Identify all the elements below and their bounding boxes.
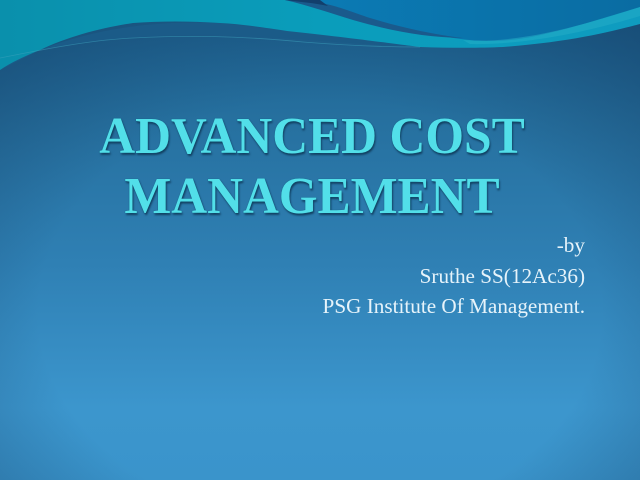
header wave: teal band — [0, 0, 640, 70]
title: MANAGEMENT — [124, 168, 500, 225]
header wave: dark band above thin line — [0, 22, 420, 70]
header wave: dark sweep tip — [285, 0, 328, 6]
header wave: blue band — [285, 0, 640, 41]
header wave: light ribbon — [463, 7, 640, 44]
title — [99, 108, 526, 225]
byline text block: -by — [557, 233, 585, 257]
title: ADVANCED COST — [99, 108, 525, 165]
byline text block — [323, 233, 585, 318]
header wave: thin light line — [0, 36, 420, 58]
header wave: dark sweep — [285, 0, 463, 38]
byline text block: PSG Institute Of Management. — [323, 294, 585, 318]
byline text block: Sruthe SS(12Ac36) — [420, 264, 585, 288]
